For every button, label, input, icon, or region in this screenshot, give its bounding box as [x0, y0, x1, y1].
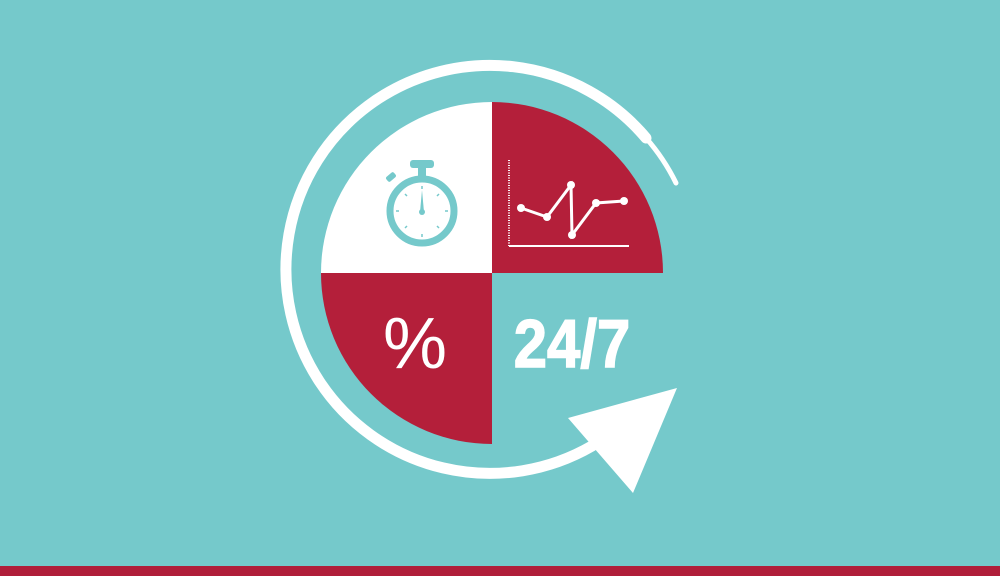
circular arrow	[286, 65, 677, 493]
quadrant circle	[321, 102, 663, 444]
icon: line chart	[509, 160, 629, 246]
icon: stopwatch	[385, 160, 454, 243]
24/7 label: 24/7	[514, 305, 630, 382]
percent sign: %	[383, 304, 447, 384]
bottom bar	[0, 566, 1000, 576]
